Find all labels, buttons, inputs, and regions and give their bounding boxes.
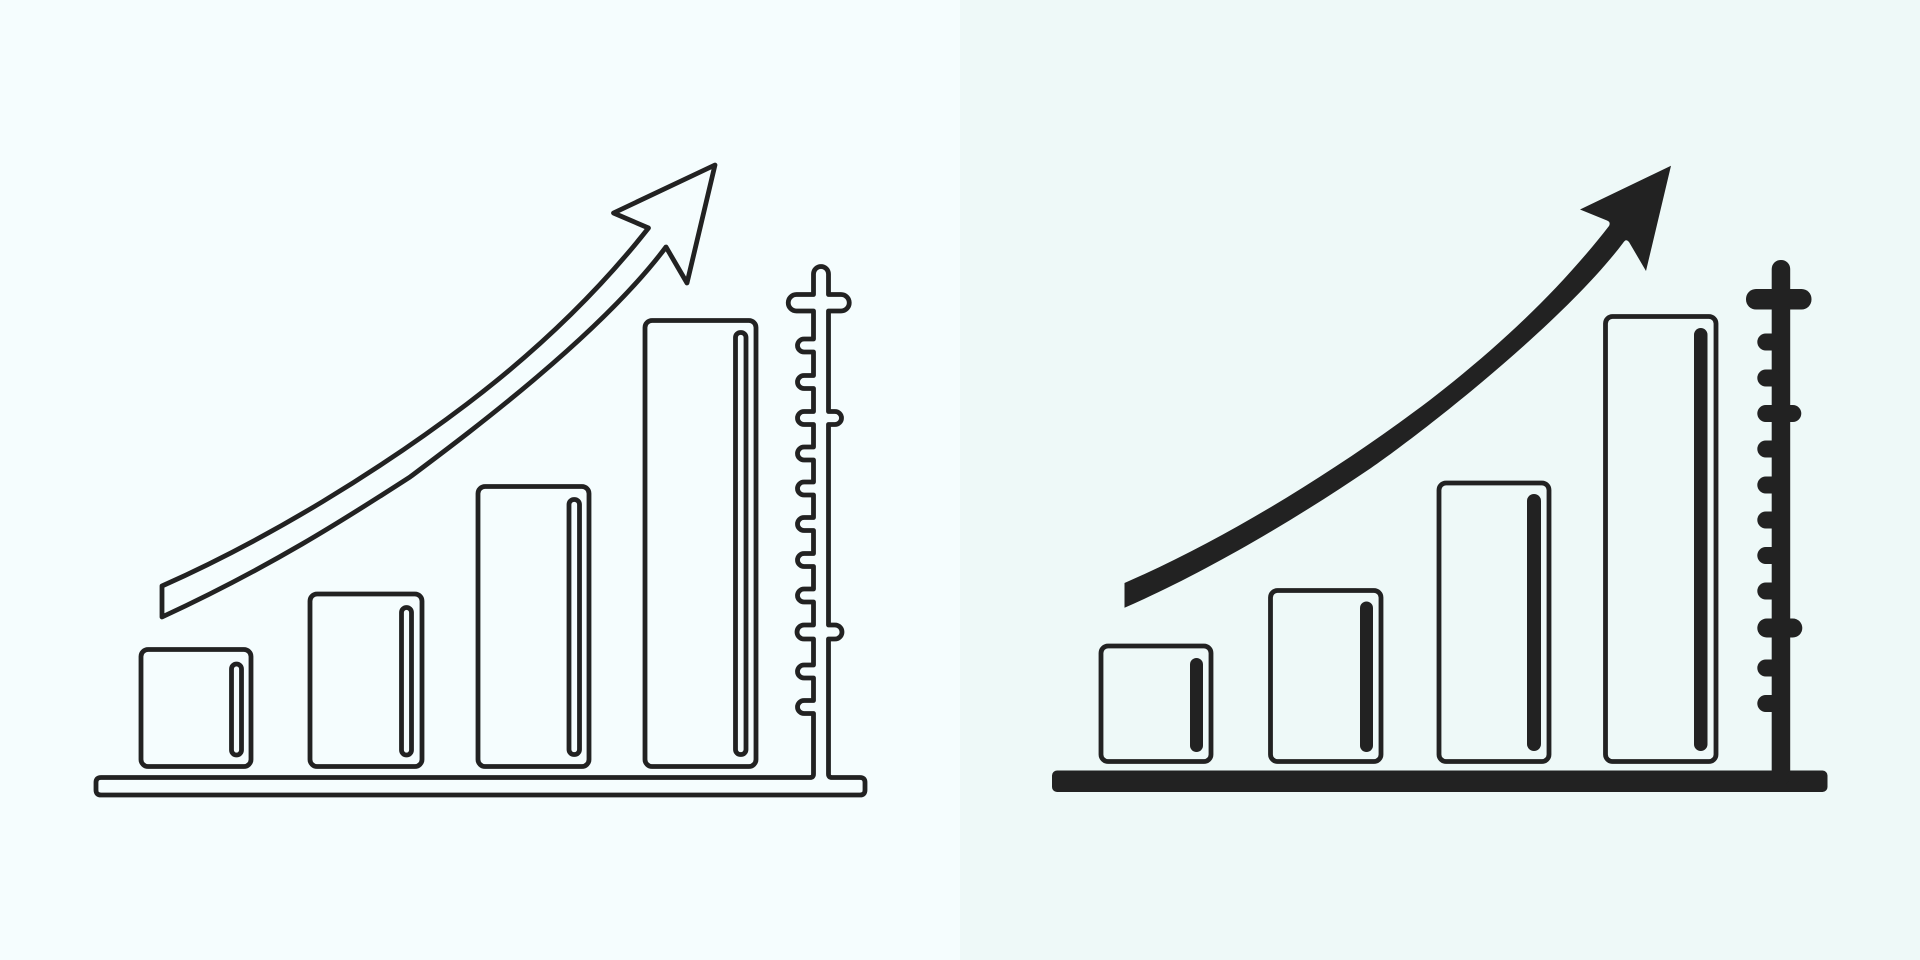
- icon: outline bars: [141, 320, 756, 766]
- axis: outline ruler and baseline: [96, 267, 865, 795]
- arrow: outline rising arrow: [162, 165, 715, 617]
- arrow: solid rising arrow: [1124, 166, 1671, 608]
- icon: solid bars: [1101, 316, 1716, 762]
- panel: solid growth chart: [960, 0, 1920, 960]
- panel: outline growth chart: [0, 0, 960, 960]
- axis: solid ruler and baseline: [1052, 260, 1828, 792]
